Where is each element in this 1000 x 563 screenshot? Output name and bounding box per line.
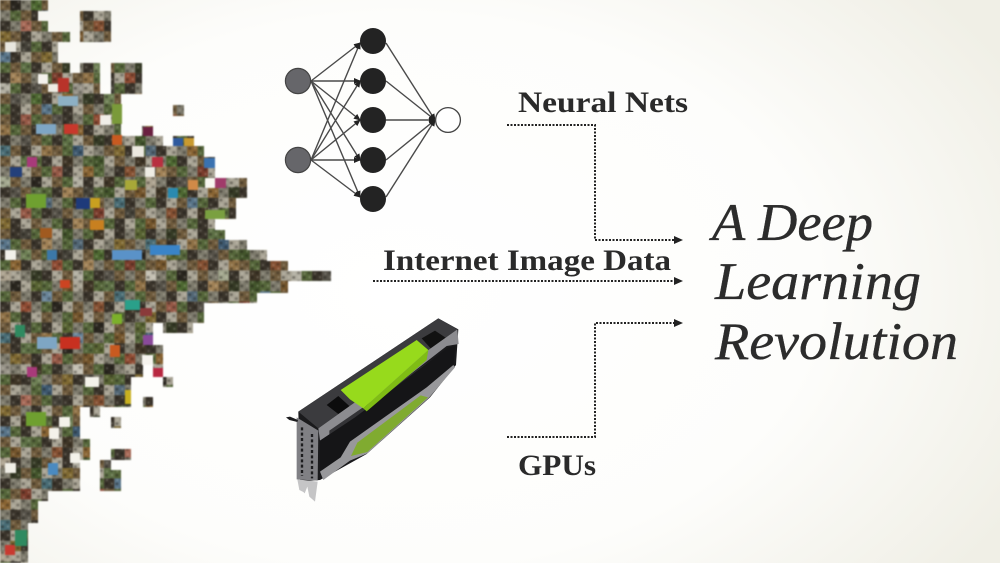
GPU card illustration (286, 318, 459, 502)
arrow: neural nets to revolution (507, 125, 683, 244)
label: Neural Nets: Neural Nets (518, 86, 688, 119)
bright green shroud top (341, 340, 428, 408)
green shroud side (363, 350, 428, 411)
title: A Deep Learning Revolution: Revolution (714, 313, 958, 371)
card body (298, 318, 458, 482)
hidden nodes (360, 28, 386, 212)
input nodes (285, 68, 311, 173)
top vent openings (327, 396, 350, 414)
lower green strip (351, 395, 428, 456)
bracket tabs (297, 479, 318, 502)
arrow: GPUs to revolution (507, 319, 683, 437)
bracket grille (302, 427, 312, 478)
label: GPUs: GPUs (518, 449, 596, 482)
black front panel (320, 346, 455, 472)
title: A Deep Learning Revolution: A Deep (709, 194, 873, 252)
output node (436, 108, 460, 132)
silver frame lower (320, 365, 455, 480)
arrow: internet image data to revolution (373, 277, 683, 285)
title: A Deep Learning Revolution (709, 194, 958, 371)
label: Internet Image Data: Internet Image Data (383, 244, 671, 277)
silver frame upper (318, 329, 459, 441)
network connections (311, 43, 435, 197)
bracket (297, 417, 318, 481)
neural network diagram (285, 28, 460, 212)
title: A Deep Learning Revolution: Learning (714, 253, 921, 311)
mosaic accent thumbnails (5, 42, 226, 555)
retention clip (286, 417, 298, 422)
top face (298, 318, 457, 428)
image mosaic of internet photos (0, 0, 331, 563)
